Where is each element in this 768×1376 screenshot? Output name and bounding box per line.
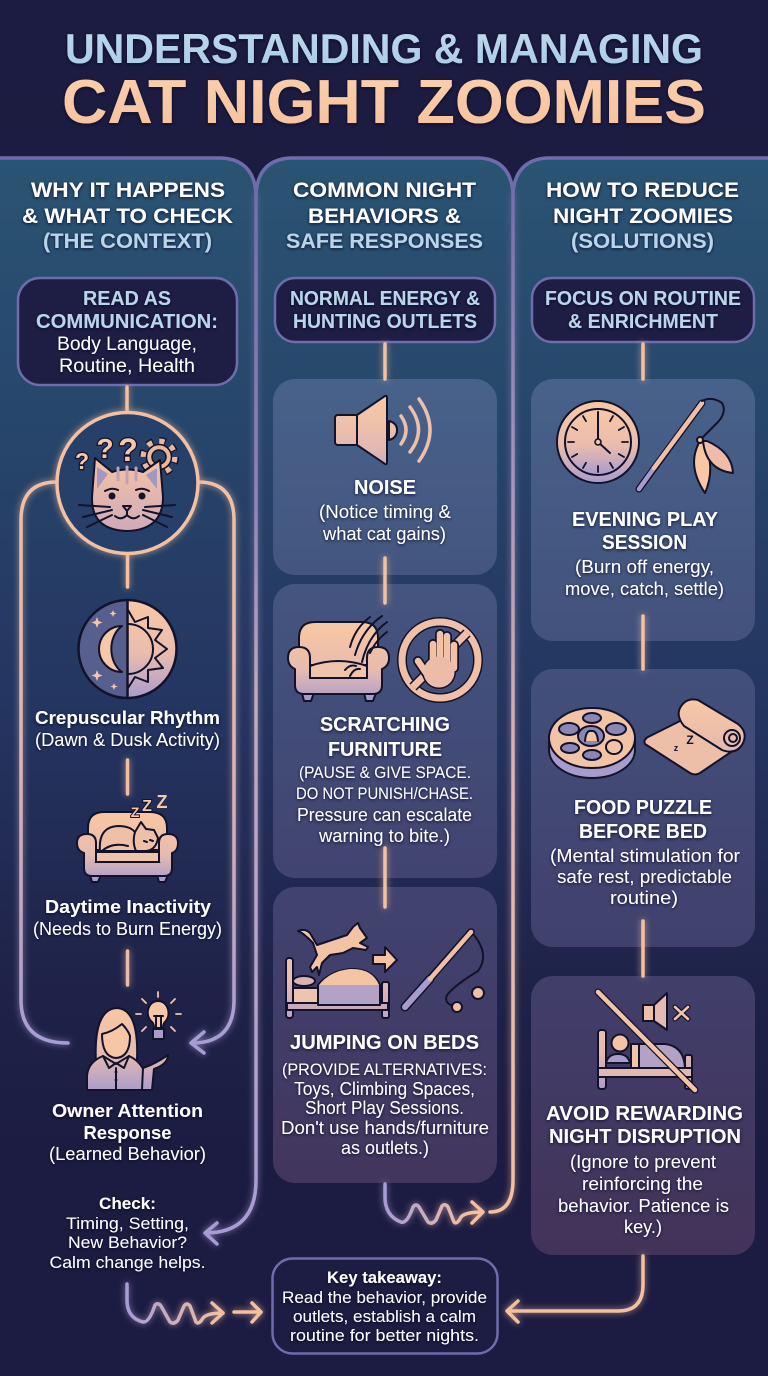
text: food puzzle: BEFORE BED bbox=[579, 820, 707, 843]
heading: why it happens: (THE CONTEXT) bbox=[43, 229, 212, 253]
connectors: right column flow bbox=[507, 344, 643, 1322]
icon: clock bbox=[557, 401, 639, 483]
text: jumping on beds: Toys, Climbing Spaces, bbox=[294, 1079, 475, 1099]
heading: how to reduce: NIGHT ZOOMIES bbox=[553, 204, 733, 228]
heading: common night behaviors: BEHAVIORS & bbox=[308, 204, 461, 228]
icon: feather wand bbox=[639, 399, 733, 493]
icon: cat jumping over bed bbox=[286, 923, 397, 1018]
text: evening play session: EVENING PLAY bbox=[572, 508, 718, 531]
text: scratching furniture: DO NOT PUNISH/CHASE. bbox=[296, 784, 473, 803]
text: scratching furniture: FURNITURE bbox=[328, 738, 442, 761]
heading: common night behaviors bbox=[286, 178, 483, 253]
label: owner attention response: (Learned Behavior) bbox=[49, 1144, 206, 1164]
label: crepuscular rhythm bbox=[35, 707, 220, 750]
icon: scratched sofa bbox=[288, 616, 389, 701]
text: jumping on beds bbox=[281, 1031, 489, 1158]
arrow: squiggle from check to key takeaway bbox=[127, 1284, 261, 1323]
card: evening play session bbox=[531, 379, 755, 641]
label: daytime inactivity: Daytime Inactivity bbox=[45, 896, 212, 917]
card: scratching furniture bbox=[273, 584, 497, 878]
callout: focus on routine: FOCUS ON ROUTINE bbox=[545, 288, 741, 310]
text: avoid rewarding: NIGHT DISRUPTION bbox=[549, 1125, 741, 1148]
card: noise bbox=[273, 379, 497, 575]
text: scratching furniture: Pressure can escalate bbox=[297, 805, 472, 825]
heading: common night behaviors: COMMON NIGHT bbox=[293, 178, 476, 202]
icon: rolled mat bbox=[644, 699, 745, 774]
callout: key takeaway: outlets, establish a calm bbox=[293, 1308, 476, 1326]
text: food puzzle: FOOD PUZZLE bbox=[574, 796, 712, 819]
callout: key takeaway bbox=[272, 1258, 498, 1354]
label: daytime inactivity bbox=[33, 896, 222, 939]
heading: why it happens bbox=[22, 178, 233, 253]
text: check: Check: bbox=[99, 1194, 156, 1213]
icon: cat with question marks: ? bbox=[118, 432, 138, 468]
panel: common night behaviors bbox=[256, 158, 513, 1376]
heading: how to reduce: HOW TO REDUCE bbox=[546, 178, 739, 202]
text: avoid rewarding: reinforcing the bbox=[582, 1174, 703, 1194]
callout: focus on routine bbox=[532, 278, 754, 342]
text: check: Calm change helps. bbox=[50, 1253, 206, 1272]
callout: read as communication bbox=[18, 278, 237, 385]
heading: why it happens: WHY IT HAPPENS bbox=[31, 178, 225, 202]
icon: wand toy with balls bbox=[405, 932, 484, 1012]
text: avoid rewarding: key.) bbox=[624, 1217, 662, 1237]
label: daytime inactivity: (Needs to Burn Energy) bbox=[33, 919, 222, 939]
text: scratching furniture bbox=[296, 713, 473, 846]
callout: normal energy bbox=[275, 278, 495, 342]
icon: moon and sun bbox=[78, 600, 176, 698]
label: owner attention response bbox=[49, 1100, 206, 1164]
text: jumping on beds: as outlets.) bbox=[341, 1138, 429, 1158]
label: owner attention response: Owner Attention bbox=[52, 1100, 203, 1121]
text: food puzzle bbox=[550, 796, 740, 908]
callout: key takeaway: Read the behavior, provide bbox=[282, 1289, 487, 1307]
text: avoid rewarding: AVOID REWARDING bbox=[546, 1102, 743, 1125]
text: noise: what cat gains) bbox=[322, 524, 446, 544]
heading: how to reduce bbox=[546, 178, 739, 253]
icon: bed with crossed out sound bbox=[598, 992, 695, 1090]
text: check: Timing, Setting, bbox=[66, 1214, 189, 1233]
heading: how to reduce: (SOLUTIONS) bbox=[571, 229, 714, 253]
callout: read as communication: READ AS bbox=[83, 288, 171, 310]
icon: no hand bbox=[402, 622, 478, 698]
text: check: New Behavior? bbox=[68, 1233, 187, 1252]
callout: read as communication: Routine, Health bbox=[59, 356, 195, 377]
text: evening play session: SESSION bbox=[602, 531, 687, 554]
panel: why it happens bbox=[0, 158, 256, 1376]
heading: why it happens: & WHAT TO CHECK bbox=[22, 204, 233, 228]
callout: key takeaway: routine for better nights. bbox=[290, 1327, 479, 1345]
text: noise: (Notice timing & bbox=[319, 502, 451, 522]
text: food puzzle: safe rest, predictable bbox=[557, 867, 732, 887]
text: jumping on beds: (PROVIDE ALTERNATIVES: bbox=[282, 1060, 487, 1079]
text: noise bbox=[319, 476, 451, 544]
callout: normal energy: NORMAL ENERGY & bbox=[290, 288, 480, 310]
callout: normal energy: HUNTING OUTLETS bbox=[293, 311, 477, 333]
icon: cat with question marks: ? bbox=[75, 448, 89, 474]
icon: cat sleeping on sofa: Z bbox=[156, 792, 168, 812]
text: scratching furniture: SCRATCHING bbox=[320, 713, 450, 736]
label: crepuscular rhythm: Crepuscular Rhythm bbox=[35, 707, 220, 728]
text: food puzzle: (Mental stimulation for bbox=[550, 846, 740, 866]
text: jumping on beds: JUMPING ON BEDS bbox=[290, 1031, 479, 1054]
text: scratching furniture: (PAUSE & GIVE SPACE. bbox=[299, 763, 471, 782]
text: avoid rewarding bbox=[546, 1102, 743, 1237]
card: food puzzle bbox=[531, 669, 755, 947]
text: evening play session: (Burn off energy, bbox=[575, 557, 714, 577]
text: noise: NOISE bbox=[354, 476, 416, 499]
text: jumping on beds: Short Play Sessions. bbox=[305, 1098, 464, 1118]
title bbox=[62, 25, 706, 137]
text: jumping on beds: Don't use hands/furniture bbox=[281, 1118, 489, 1138]
icon: cat sleeping on sofa bbox=[77, 792, 178, 882]
callout: read as communication: COMMUNICATION: bbox=[36, 311, 218, 333]
title: CAT NIGHT ZOOMIES bbox=[62, 68, 706, 137]
connectors: left column flow bbox=[21, 387, 234, 1053]
callout: key takeaway: Key takeaway: bbox=[327, 1269, 442, 1287]
icon: food puzzle bbox=[549, 708, 635, 778]
arrow: left column border to check bbox=[205, 194, 256, 1244]
text: scratching furniture: warning to bite.) bbox=[318, 826, 450, 846]
label: owner attention response: Response bbox=[84, 1122, 172, 1143]
icon: owner with lightbulb bbox=[87, 992, 181, 1090]
label: crepuscular rhythm: (Dawn & Dusk Activity) bbox=[35, 730, 220, 750]
title: UNDERSTANDING & MANAGING bbox=[65, 25, 703, 72]
icon: rolled mat: z bbox=[674, 743, 679, 753]
card: avoid rewarding bbox=[531, 976, 755, 1255]
icon: rolled mat: Z bbox=[686, 733, 694, 747]
text: check bbox=[50, 1194, 206, 1272]
icon: speaker bbox=[335, 396, 430, 464]
arrow: squiggle from jumping card to middle column border bbox=[385, 194, 513, 1223]
heading: common night behaviors: SAFE RESPONSES bbox=[286, 229, 483, 253]
text: food puzzle: routine) bbox=[610, 888, 678, 908]
callout: read as communication: Body Language, bbox=[57, 334, 197, 355]
text: evening play session bbox=[565, 508, 724, 599]
connectors: middle column flow bbox=[383, 344, 387, 907]
callout: focus on routine: & ENRICHMENT bbox=[568, 311, 718, 333]
icon: cat sleeping on sofa: Z bbox=[131, 804, 140, 820]
card: jumping on beds bbox=[273, 887, 497, 1183]
icon: cat with question marks bbox=[57, 412, 198, 554]
panel: how to reduce bbox=[507, 158, 768, 1376]
icon: cat with question marks: ? bbox=[96, 433, 114, 464]
text: evening play session: move, catch, settle) bbox=[565, 579, 724, 599]
text: avoid rewarding: (Ignore to prevent bbox=[570, 1152, 716, 1172]
text: avoid rewarding: behavior. Patience is bbox=[558, 1196, 729, 1216]
icon: cat sleeping on sofa: Z bbox=[142, 798, 152, 815]
